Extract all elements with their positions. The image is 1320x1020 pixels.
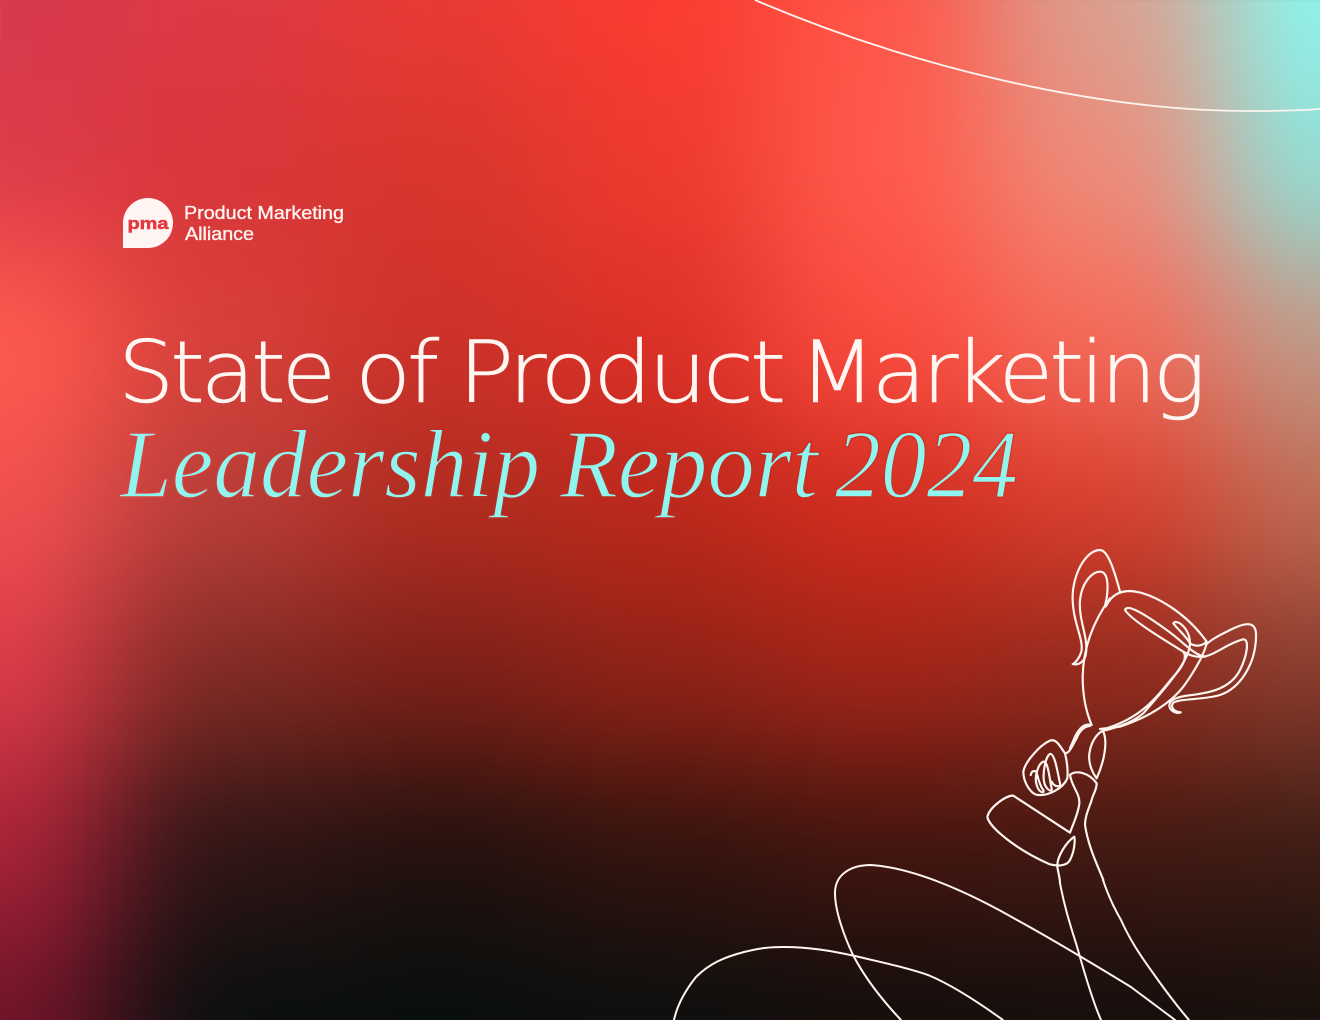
subtitle: Report xyxy=(559,411,820,518)
arm and sweeping line xyxy=(1060,883,1101,1020)
title: Marketing xyxy=(799,323,1202,423)
icon: one-line trophy held in hand xyxy=(674,550,1256,1020)
title: Product xyxy=(458,323,782,423)
lower loop line xyxy=(674,947,1003,1020)
icon: pma speech bubble xyxy=(123,198,173,248)
subtitle: 2024 xyxy=(835,411,1018,518)
fist and fingers xyxy=(1023,726,1090,795)
title: of xyxy=(355,323,439,423)
decorative curve: top right xyxy=(755,0,1320,111)
icon: pma speech bubble: pma xyxy=(128,214,169,233)
logo wordmark: Alliance xyxy=(185,224,254,244)
subtitle: Leadership xyxy=(118,411,540,518)
logo wordmark: Product Marketing xyxy=(184,203,344,223)
title: State xyxy=(118,323,332,423)
logo: Product Marketing Alliance xyxy=(123,198,349,248)
